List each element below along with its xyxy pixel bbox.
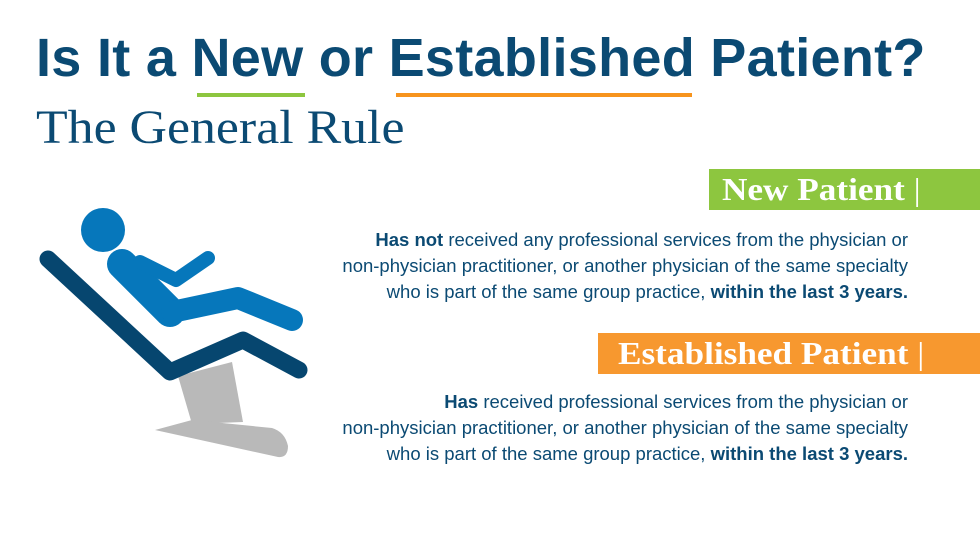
text: established patient definition [342, 391, 908, 464]
label bar: new patient: New Patient | [722, 171, 921, 207]
text: established patient definition: non-physician practitioner, or another physician of the same specialty [342, 417, 908, 438]
label bar: new patient [709, 169, 980, 210]
chair frame [48, 259, 299, 372]
patient figure [81, 208, 292, 320]
text: new patient definition: Has not received any professional services from the physician or [375, 229, 908, 250]
text: new patient definition: non-physician practitioner, or another physician of the same specialty [342, 255, 908, 276]
chair base [155, 362, 288, 457]
subtitle: The General Rule [36, 101, 404, 154]
text: established patient definition: Has received professional services from the physician or [444, 391, 908, 412]
underline: established [396, 93, 692, 97]
label bar: established patient: Established Patient | [618, 335, 924, 371]
text: new patient definition: who is part of the same group practice, within the last 3 years. [387, 281, 908, 302]
text: new patient definition [342, 229, 908, 302]
title: Is It a New or Established Patient? [36, 28, 926, 88]
icon: dental chair with patient [40, 208, 308, 458]
underline: new [197, 93, 305, 97]
text: established patient definition: who is part of the same group practice, within the last 3 years. [387, 443, 908, 464]
